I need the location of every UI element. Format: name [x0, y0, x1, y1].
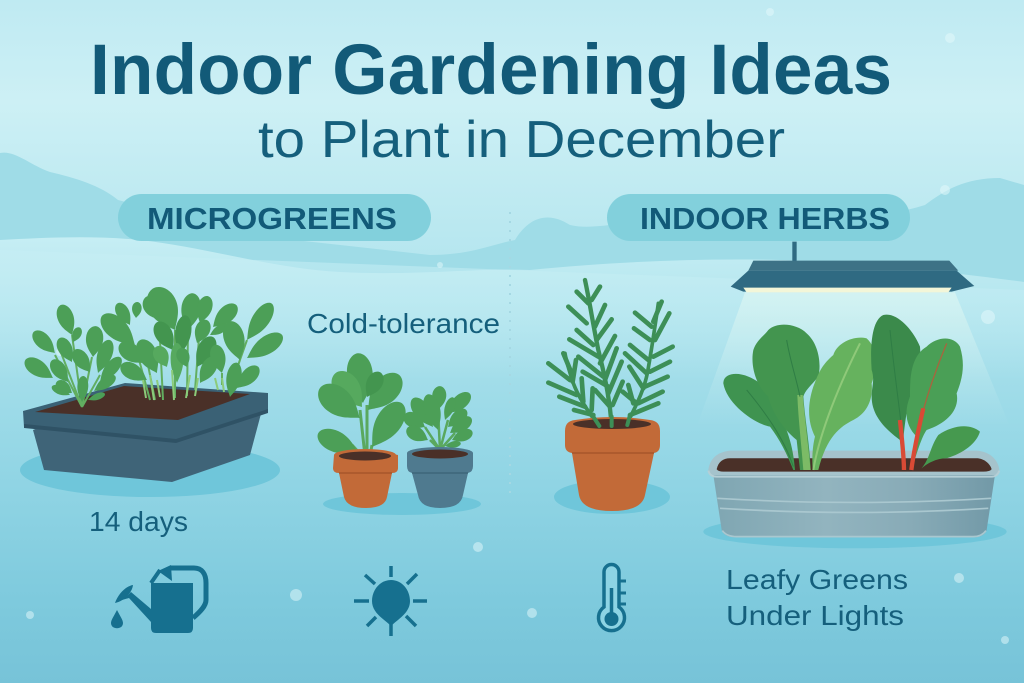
grow light: [697, 242, 1010, 427]
caption: leafy greens under lights: [726, 564, 908, 631]
heading pill: microgreens: MICROGREENS: [147, 201, 397, 236]
label: 14 days: 14 days: [89, 506, 188, 537]
label: cold-tolerance: Cold-tolerance: [307, 308, 500, 339]
icon: sun: [354, 566, 427, 636]
plant in clay pot: [312, 352, 412, 508]
caption: leafy greens under lights: Leafy Greens: [726, 564, 908, 595]
spinach: [723, 325, 876, 470]
icon: thermometer: [599, 564, 626, 631]
heading pill: microgreens: [118, 194, 431, 241]
caption: leafy greens under lights: Under Lights: [726, 600, 904, 631]
rosemary pot: [548, 280, 673, 514]
microgreens tray: [20, 282, 287, 497]
heading pill: indoor herbs: [607, 194, 910, 241]
microgreen leaves: [21, 282, 287, 407]
icon: watering can: [111, 565, 206, 633]
subtitle: to Plant in December: [258, 111, 785, 169]
chard: [871, 315, 980, 470]
rosemary sprigs: [548, 280, 673, 425]
title: Indoor Gardening Ideas: [90, 31, 892, 110]
heading pill: indoor herbs: INDOOR HERBS: [640, 201, 890, 236]
plant in slate pot: [401, 385, 475, 508]
leafy greens in trough: [703, 315, 1007, 548]
small pots: [312, 352, 481, 515]
